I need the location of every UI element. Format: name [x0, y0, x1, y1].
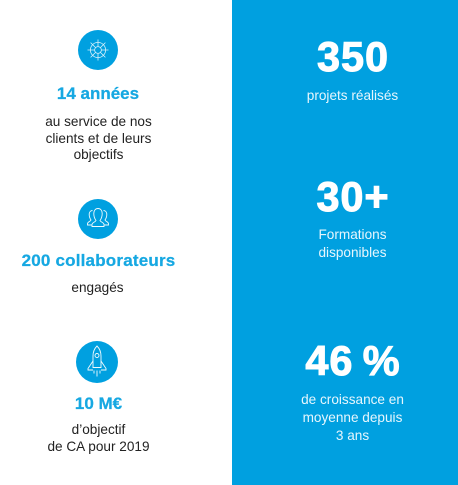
panel: blue statistics background	[232, 0, 458, 485]
heading: 10 M€: 10 M€	[75, 394, 122, 413]
stat: 350: 350	[317, 33, 389, 80]
stat: 46 %: 46 %	[305, 337, 401, 384]
text: engagés: engagés	[71, 280, 124, 295]
icon: ship wheel	[78, 30, 118, 70]
stat: 30+: 30+	[316, 173, 390, 220]
text: au service de nos clients	[45, 114, 152, 162]
heading: 200 collaborateurs: 200 collaborateurs	[22, 251, 175, 270]
text: Formations disponibles	[318, 227, 386, 260]
icon: group of people	[78, 199, 118, 239]
text: au service de nos clients: au service de nos	[45, 114, 152, 129]
text: de croissance	[301, 392, 404, 443]
text: au service de nos clients: clients et de leurs	[46, 130, 151, 146]
heading: 14 années: 14 années	[57, 84, 139, 103]
icon: rocket	[76, 341, 118, 383]
text: Formations disponibles: Formations	[318, 227, 386, 242]
text: au service de nos clients: objectifs	[74, 147, 123, 162]
text: Formations disponibles: disponibles	[318, 245, 386, 260]
text: de croissance: de croissance en	[301, 392, 404, 407]
text: d'objectif de CA pour 2019	[47, 422, 150, 454]
text: d'objectif de CA pour 2019: d’objectif	[72, 422, 125, 437]
text: de croissance: moyenne depuis	[303, 410, 402, 425]
text: d'objectif de CA pour 2019: de CA pour 2019	[47, 438, 150, 454]
text: projets réalisés: projets réalisés	[307, 88, 398, 103]
text: de croissance: 3 ans	[336, 428, 369, 443]
